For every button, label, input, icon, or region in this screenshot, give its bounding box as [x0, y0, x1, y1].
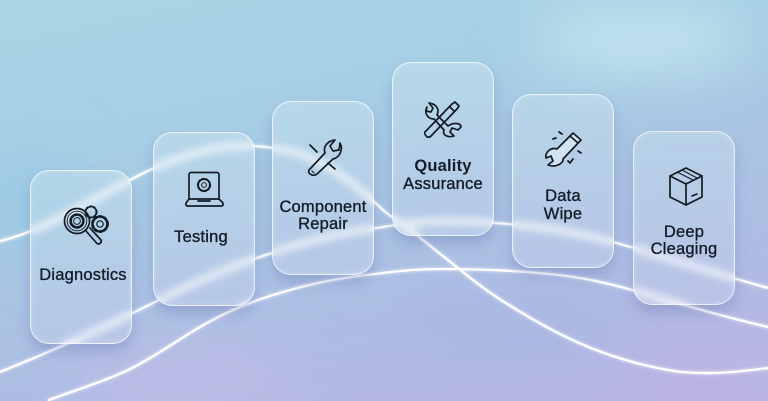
- labels: Component Repair: [279, 198, 367, 233]
- labels: Deep Cleaging: Cleaging: [651, 240, 717, 258]
- icon: laptop with gear: [185, 172, 224, 207]
- labels: Deep Cleaging: [651, 223, 717, 258]
- panel: Data Wipe: [512, 94, 614, 268]
- label: Diagnostics: Diagnostics: [39, 266, 127, 284]
- labels: Deep Cleaging: Deep: [664, 223, 704, 241]
- panel: Quality Assurance: [392, 62, 494, 236]
- labels: Quality Assurance: [402, 157, 483, 192]
- panel: Deep Cleaging: [633, 131, 735, 305]
- labels: Data Wipe: Wipe: [544, 204, 582, 222]
- labels: Data Wipe: [544, 187, 582, 223]
- labels: Quality Assurance: Assurance: [403, 174, 483, 192]
- icon: cardboard box: [669, 167, 703, 206]
- icon: magnifier with gears: [64, 206, 109, 245]
- panel: Testing: [153, 132, 255, 306]
- panel: Component Repair: [272, 101, 374, 275]
- icon: wrench with sparkles: [545, 131, 582, 167]
- label: Testing: Testing: [174, 228, 228, 246]
- labels: Quality Assurance: Quality: [414, 157, 472, 175]
- panel: Diagnostics: [30, 170, 132, 344]
- icon: crossed wrench and screwdriver: [424, 101, 462, 138]
- labels: Component Repair: Component: [279, 198, 367, 216]
- labels: Component Repair: Repair: [298, 214, 348, 232]
- labels: Data Wipe: Data: [545, 187, 581, 205]
- icon: wrench with sparks: [308, 139, 342, 176]
